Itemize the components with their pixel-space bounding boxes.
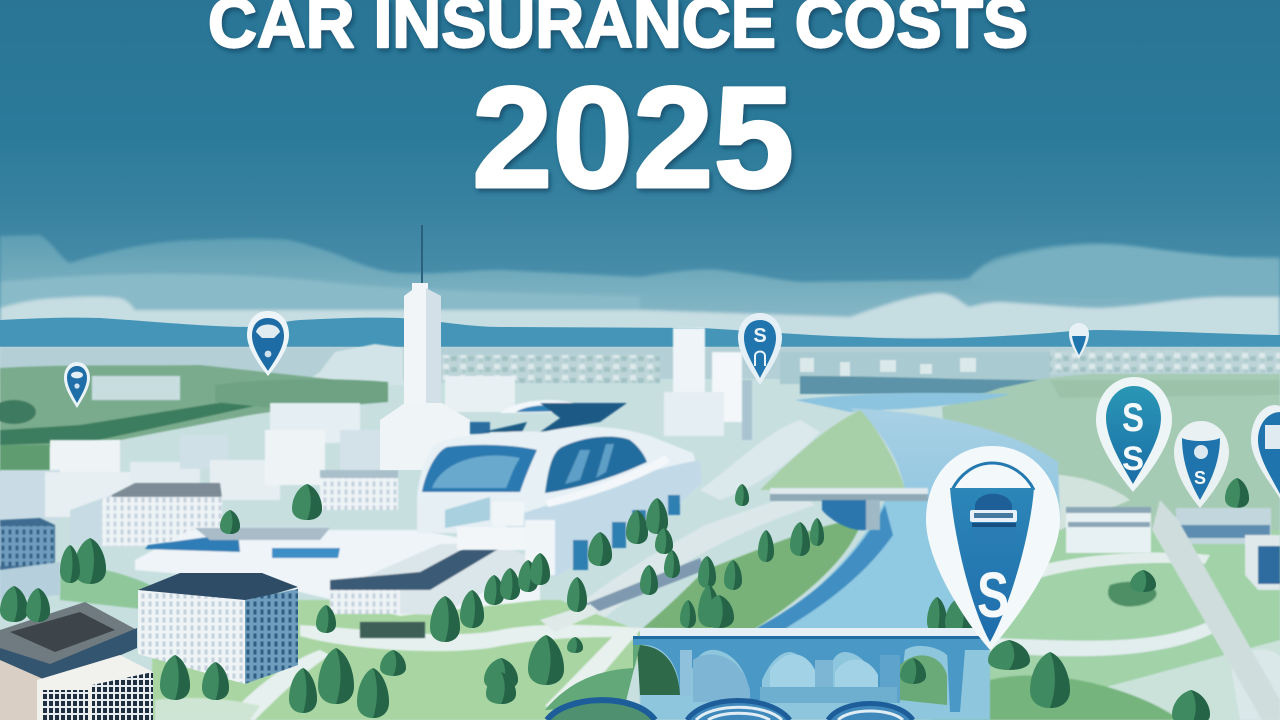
tan building bottom left bbox=[0, 602, 137, 720]
right green landscape bbox=[900, 374, 1280, 720]
map pin: far right, cropped bbox=[1251, 405, 1280, 500]
title: year 2025: 2025 bbox=[472, 57, 794, 218]
central green hill bbox=[565, 410, 905, 630]
distant city skyline bbox=[0, 344, 1280, 394]
map pin: right dollar pin bbox=[1096, 377, 1172, 492]
map pin: large car with dollar sign: S bbox=[977, 559, 1009, 631]
far right towers bbox=[664, 328, 752, 440]
grey roof building bbox=[102, 483, 222, 546]
map pin: right dollar pin: S bbox=[1122, 440, 1144, 478]
white building with dark roof bbox=[138, 573, 298, 684]
sky background bbox=[0, 0, 1280, 335]
side window bbox=[545, 437, 647, 493]
long low white complex bbox=[135, 528, 540, 638]
map pin: right dollar pin: S bbox=[1122, 396, 1144, 440]
map pin: center right bbox=[738, 313, 782, 385]
white city buildings bbox=[0, 376, 515, 545]
trees central hill bbox=[640, 484, 975, 635]
map pin: upper left bbox=[247, 311, 289, 376]
tall white tower bbox=[380, 225, 470, 470]
map pin: small far left bbox=[64, 362, 90, 408]
clouds bbox=[0, 235, 1280, 340]
map pin: large car with dollar sign bbox=[926, 446, 1060, 650]
car body bbox=[417, 427, 702, 577]
map pin: right smaller pin bbox=[1174, 421, 1229, 508]
low buildings on right bbox=[1066, 500, 1280, 720]
river bbox=[640, 393, 1060, 720]
lower blocks and blue panels bbox=[417, 497, 492, 533]
lower green park with paths bbox=[60, 567, 650, 720]
distant blue hills bbox=[0, 318, 1280, 350]
dark blue building left bbox=[0, 518, 60, 600]
map pin: right smaller pin: S bbox=[1194, 468, 1206, 488]
car icon bbox=[970, 494, 1017, 545]
map pin: center right: S bbox=[753, 325, 767, 347]
car-shaped central building bbox=[417, 400, 702, 577]
map pin: small far right bbox=[1069, 323, 1089, 359]
lower arched bridge bbox=[545, 628, 990, 712]
upper bridge over river bbox=[770, 488, 928, 530]
white building with black windows bbox=[37, 655, 153, 720]
trees right park bbox=[900, 478, 1249, 720]
front windscreen bbox=[422, 445, 537, 492]
trees left park bbox=[0, 484, 668, 718]
ground base bbox=[0, 347, 1280, 720]
blue domes at bottom bbox=[547, 700, 913, 720]
car roof arch bbox=[500, 400, 592, 413]
left green fields bbox=[0, 365, 388, 472]
